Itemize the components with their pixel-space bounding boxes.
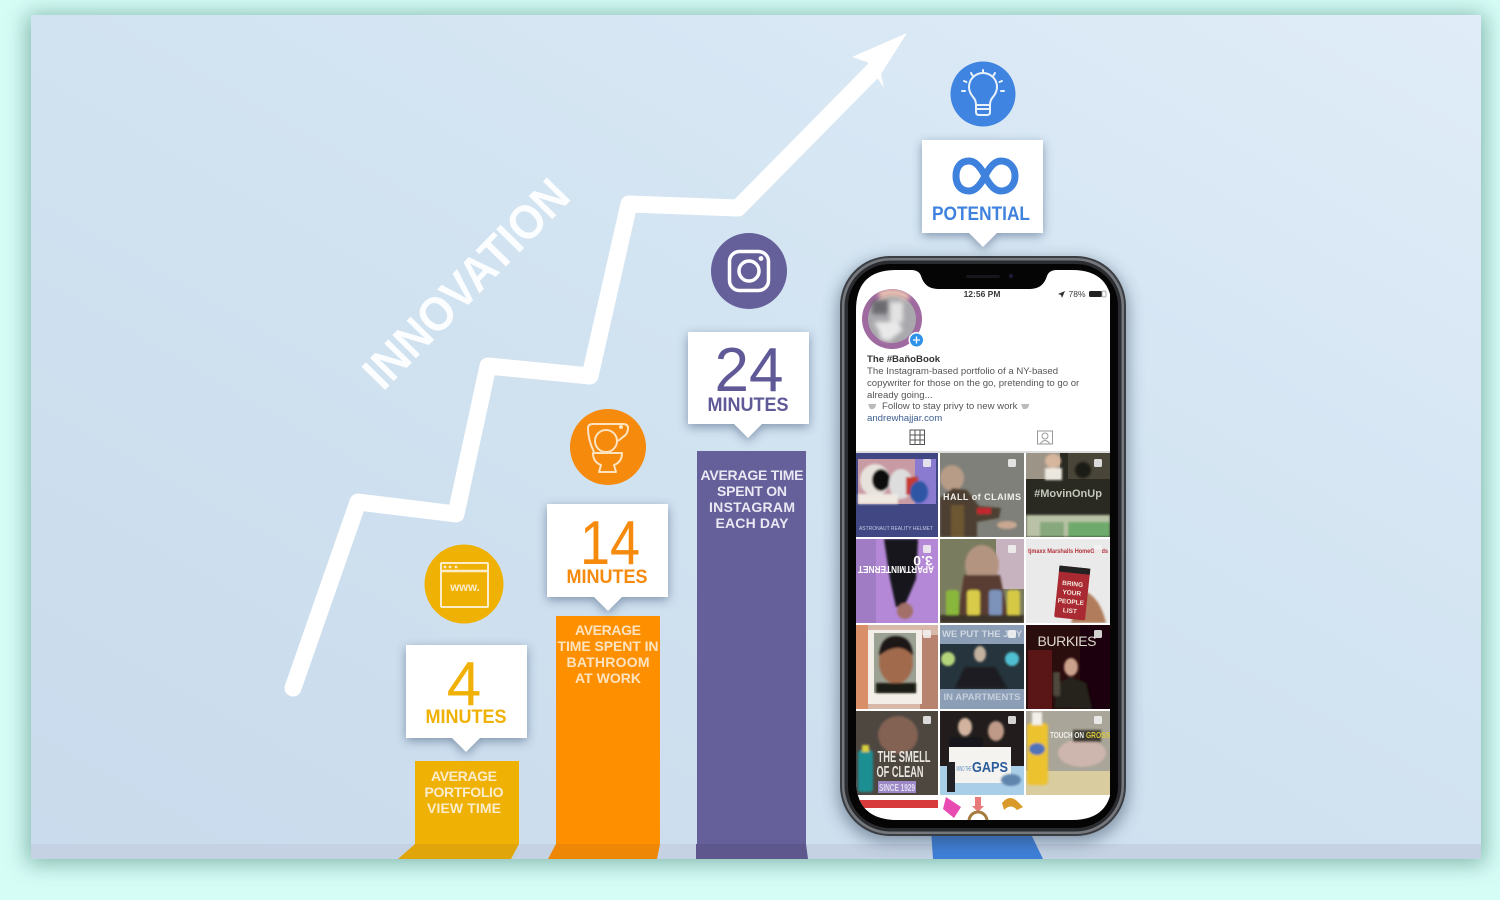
partial next row [860, 797, 1023, 820]
bar: instagram each day: INSTAGRAM [709, 499, 795, 515]
thumbnail: apartment internet: 3.0 [913, 553, 933, 569]
floor band [31, 844, 1481, 859]
thumbnail: astronaut helmet: ASTRONAUT REALITY HELMET [859, 526, 934, 532]
phone shadow [838, 260, 1128, 842]
thumbnail: bring your people list [1026, 539, 1110, 623]
callout: 4 minutes [406, 645, 527, 755]
icon: web browser: www. [449, 582, 480, 594]
bar: portfolio view time: PORTFOLIO [424, 784, 504, 800]
bar: portfolio view time: AVERAGE [431, 768, 497, 784]
callout: 24 minutes [688, 332, 809, 441]
thumbnail: apartment internet: APARTMINTERNET [858, 563, 934, 574]
phone screen [856, 270, 1110, 830]
callout: 14 minutes: 14 [580, 509, 640, 578]
phone notch speaker [966, 275, 1000, 278]
thumbnail: bring your people list: tjmaxx Marshalls HomeGoods [1028, 548, 1108, 555]
bar: portfolio view time: VIEW TIME [427, 800, 501, 816]
profile bio: copywriter for those on the go, pretending to go or [867, 378, 1080, 389]
thumbnail: we put the joy in apartments: IN APARTMENTS [943, 692, 1021, 703]
callout: 24 minutes: MINUTES [708, 394, 788, 416]
photo grid [856, 451, 1110, 830]
profile bio: The #BañoBook [867, 354, 941, 365]
bar: portfolio view time [398, 761, 519, 859]
icon: toilet [570, 409, 646, 485]
profile bio: andrewhajjar.com [867, 413, 942, 424]
status bar [964, 290, 1106, 298]
icon: web browser [424, 544, 504, 624]
callout: infinite potential: POTENTIAL [932, 203, 1030, 225]
thumbnail: the smell of clean: THE SMELL [878, 749, 930, 766]
callout: 4 minutes: MINUTES [426, 706, 506, 728]
callout: 24 minutes: 24 [715, 336, 783, 405]
thumbnail: the smell of clean: OF CLEAN [876, 764, 924, 781]
thumbnail corner badges [923, 459, 1102, 724]
thumbnail: movin on up: #MovinOnUp [1034, 488, 1102, 500]
thumbnail: apartment internet [856, 539, 938, 623]
thumbnail: touch on gross: TOUCH ON [1050, 730, 1084, 740]
bar: bathroom at work: AVERAGE [575, 622, 641, 638]
callout: 4 minutes: 4 [447, 650, 481, 719]
thumbnail: touch on gross: GROSS [1086, 730, 1110, 740]
thumbnail: portrait [856, 625, 938, 709]
bar: instagram each day: AVERAGE TIME [700, 467, 804, 483]
thumbnail: cleaning bottles [940, 539, 1024, 623]
profile bio: The Instagram-based portfolio of a NY-based [867, 366, 1058, 377]
heading: innovation: INNOVATION [353, 169, 580, 400]
icon: light bulb [950, 62, 1016, 126]
profile bio [867, 354, 1080, 424]
thumbnail: we put the joy in apartments [940, 625, 1024, 709]
status bar: 78% [1068, 289, 1086, 299]
bar: bathroom at work: BATHROOM [566, 654, 650, 670]
bar: bathroom at work: AT WORK [575, 670, 641, 686]
thumbnail: the smell of clean: SINCE 1929 [879, 783, 915, 794]
status bar: 12:56 PM [964, 289, 1000, 299]
thumbnail: mind the gaps: GAPS [972, 759, 1008, 776]
profile bio: already going... [867, 390, 933, 401]
thumbnail: mind the gaps [940, 711, 1024, 795]
thumbnail: hall of claims: HALL of CLAIMS [943, 492, 1021, 502]
phone body [840, 256, 1126, 836]
callout: 14 minutes [547, 504, 668, 614]
thumbnail: the smell of clean [856, 711, 938, 795]
thumbnail: bring your people list: LIST [1062, 607, 1077, 616]
phone [838, 256, 1128, 842]
thumbnail: mind the gaps: MIND THE [956, 766, 972, 773]
bar: instagram each day: EACH DAY [716, 515, 789, 531]
thumbnail: hall of claims [940, 453, 1024, 537]
profile bio: Follow to stay privy to new work [882, 401, 1018, 412]
thumbnail: burkies: BURKIES [1038, 633, 1096, 649]
bar: bathroom at work: TIME SPENT IN [558, 638, 658, 654]
callout: infinite potential [922, 140, 1043, 250]
bar: instagram each day: SPENT ON [717, 483, 787, 499]
arrow: innovation growth line [284, 33, 907, 696]
tab icons [910, 430, 1052, 444]
icon: instagram [711, 233, 787, 309]
bar: bathroom at work [548, 616, 660, 859]
bar: instagram each day [696, 451, 808, 859]
thumbnail: bring your people list: BRING [1062, 580, 1083, 589]
thumbnail: bring your people list: PEOPLE [1057, 598, 1085, 607]
thumbnail: movin on up [1026, 453, 1110, 537]
bar: potential base [931, 830, 1043, 859]
thumbnail: bring your people list: YOUR [1062, 589, 1082, 598]
thumbnail: burkies [1026, 625, 1110, 709]
profile avatar [862, 289, 924, 349]
callout: 14 minutes: MINUTES [566, 566, 648, 588]
thumbnail: we put the joy in apartments: WE PUT THE JOY [942, 629, 1023, 640]
thumbnail: astronaut helmet [856, 453, 938, 537]
thumbnail: touch on gross [1026, 711, 1110, 795]
